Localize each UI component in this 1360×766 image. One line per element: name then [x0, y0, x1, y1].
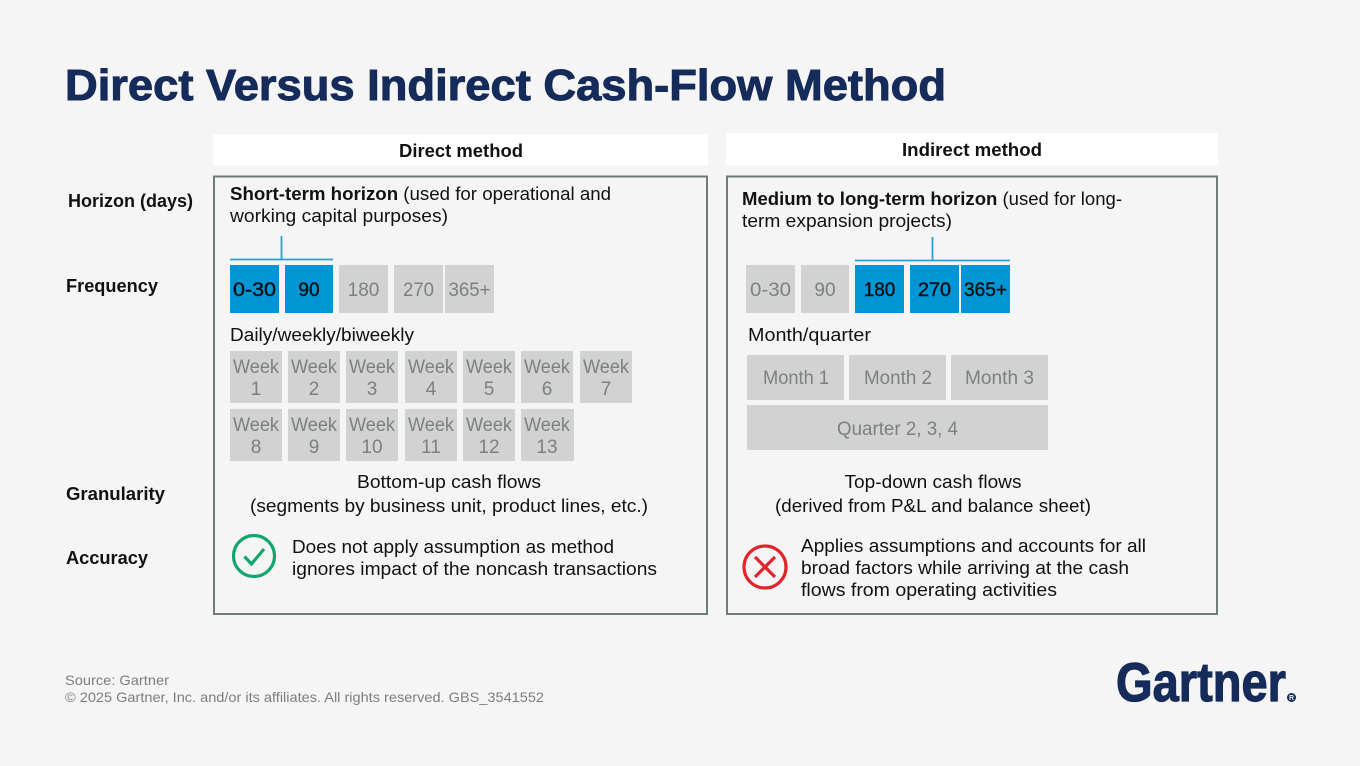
week boxes: Week [524, 357, 570, 378]
frequency label: Month/quarter [748, 325, 871, 345]
day boxes: 0-30 [750, 280, 791, 301]
week boxes: Week [408, 357, 454, 378]
week boxes: Week [233, 415, 279, 436]
header: indirect method [726, 133, 1218, 165]
logo: Gartner: R [1289, 695, 1294, 702]
granularity text [250, 472, 648, 516]
day boxes: 180 [348, 280, 379, 301]
week boxes: 5 [484, 379, 494, 400]
week boxes: 4 [426, 379, 437, 400]
day boxes [230, 265, 494, 313]
accuracy text: ignores impact of the noncash transactions [292, 559, 657, 579]
panel: direct method [213, 134, 708, 614]
bracket [230, 236, 333, 260]
granularity text [775, 472, 1091, 516]
week boxes: 10 [361, 437, 383, 458]
month boxes: Quarter 2, 3, 4 [837, 419, 958, 440]
week boxes: 3 [367, 379, 377, 400]
granularity text: Bottom-up cash flows [357, 472, 541, 492]
day boxes: 270 [403, 280, 434, 301]
month boxes: Month 2 [864, 368, 932, 389]
week boxes: Week [291, 357, 337, 378]
horizon description: Medium to long-term horizon (used for long- [742, 189, 1122, 209]
header: direct method [213, 134, 708, 165]
week boxes: 12 [478, 437, 500, 458]
week boxes: Week [583, 357, 629, 378]
week boxes: 2 [309, 379, 319, 400]
day boxes: 0-30 [233, 280, 276, 301]
week boxes [230, 351, 632, 461]
row label: frequency: Frequency [66, 276, 158, 296]
horizon description [742, 189, 1122, 231]
week boxes: Week [408, 415, 454, 436]
accuracy text [292, 537, 657, 579]
accuracy text: Applies assumptions and accounts for all [801, 536, 1146, 556]
row label: accuracy: Accuracy [66, 548, 148, 568]
logo: Gartner: Gartner [1116, 651, 1286, 713]
bracket [855, 237, 1010, 260]
week boxes: Week [349, 357, 395, 378]
day boxes: 180 [864, 280, 895, 301]
accuracy text: flows from operating activities [801, 580, 1057, 600]
accuracy text [801, 536, 1146, 600]
title: Direct Versus Indirect Cash-Flow Method [65, 61, 946, 110]
week boxes: 8 [251, 437, 261, 458]
accuracy text: Does not apply assumption as method [292, 537, 614, 557]
horizon description [229, 184, 611, 226]
header: direct method: Direct method [399, 141, 523, 161]
month boxes: Month 3 [965, 368, 1034, 389]
week boxes: 13 [536, 437, 558, 458]
icon: green check [234, 536, 274, 576]
accuracy text: broad factors while arriving at the cash [801, 558, 1129, 578]
panel border [214, 176, 707, 614]
week boxes: 9 [309, 437, 319, 458]
icon: red cross [744, 546, 786, 588]
week boxes: Week [233, 357, 279, 378]
week boxes: 1 [251, 379, 261, 400]
header: indirect method: Indirect method [902, 140, 1042, 160]
week boxes: Week [524, 415, 570, 436]
week boxes: Week [466, 415, 512, 436]
panel border [727, 176, 1217, 614]
source and copyright: Source: Gartner [65, 672, 169, 688]
source and copyright [65, 672, 544, 705]
frequency label: Daily/weekly/biweekly [230, 325, 414, 345]
day boxes: 365+ [964, 280, 1007, 301]
week boxes: 11 [421, 437, 441, 458]
week boxes: Week [349, 415, 395, 436]
month boxes: Month 1 [763, 368, 829, 389]
week boxes: Week [291, 415, 337, 436]
week boxes: 7 [601, 379, 611, 400]
day boxes: 90 [814, 280, 836, 301]
horizon description: Short-term horizon (used for operational and [230, 184, 611, 204]
day boxes: 90 [298, 280, 320, 301]
granularity text: (segments by business unit, product lines, etc.) [250, 496, 648, 516]
day boxes: 270 [918, 280, 951, 301]
day boxes [746, 265, 1010, 313]
month boxes [747, 355, 1048, 450]
panel: indirect method [726, 133, 1218, 614]
row label: horizon: Horizon (days) [68, 191, 193, 211]
horizon description: term expansion projects) [742, 211, 952, 231]
week boxes: 6 [542, 379, 552, 400]
horizon description: working capital purposes) [229, 206, 448, 226]
source and copyright: © 2025 Gartner, Inc. and/or its affiliates. All rights reserved. GBS_3541552 [65, 689, 544, 705]
week boxes: Week [466, 357, 512, 378]
day boxes: 365+ [448, 280, 490, 301]
granularity text: Top-down cash flows [844, 472, 1022, 492]
granularity text: (derived from P&L and balance sheet) [775, 496, 1091, 516]
row label: granularity: Granularity [66, 484, 165, 504]
